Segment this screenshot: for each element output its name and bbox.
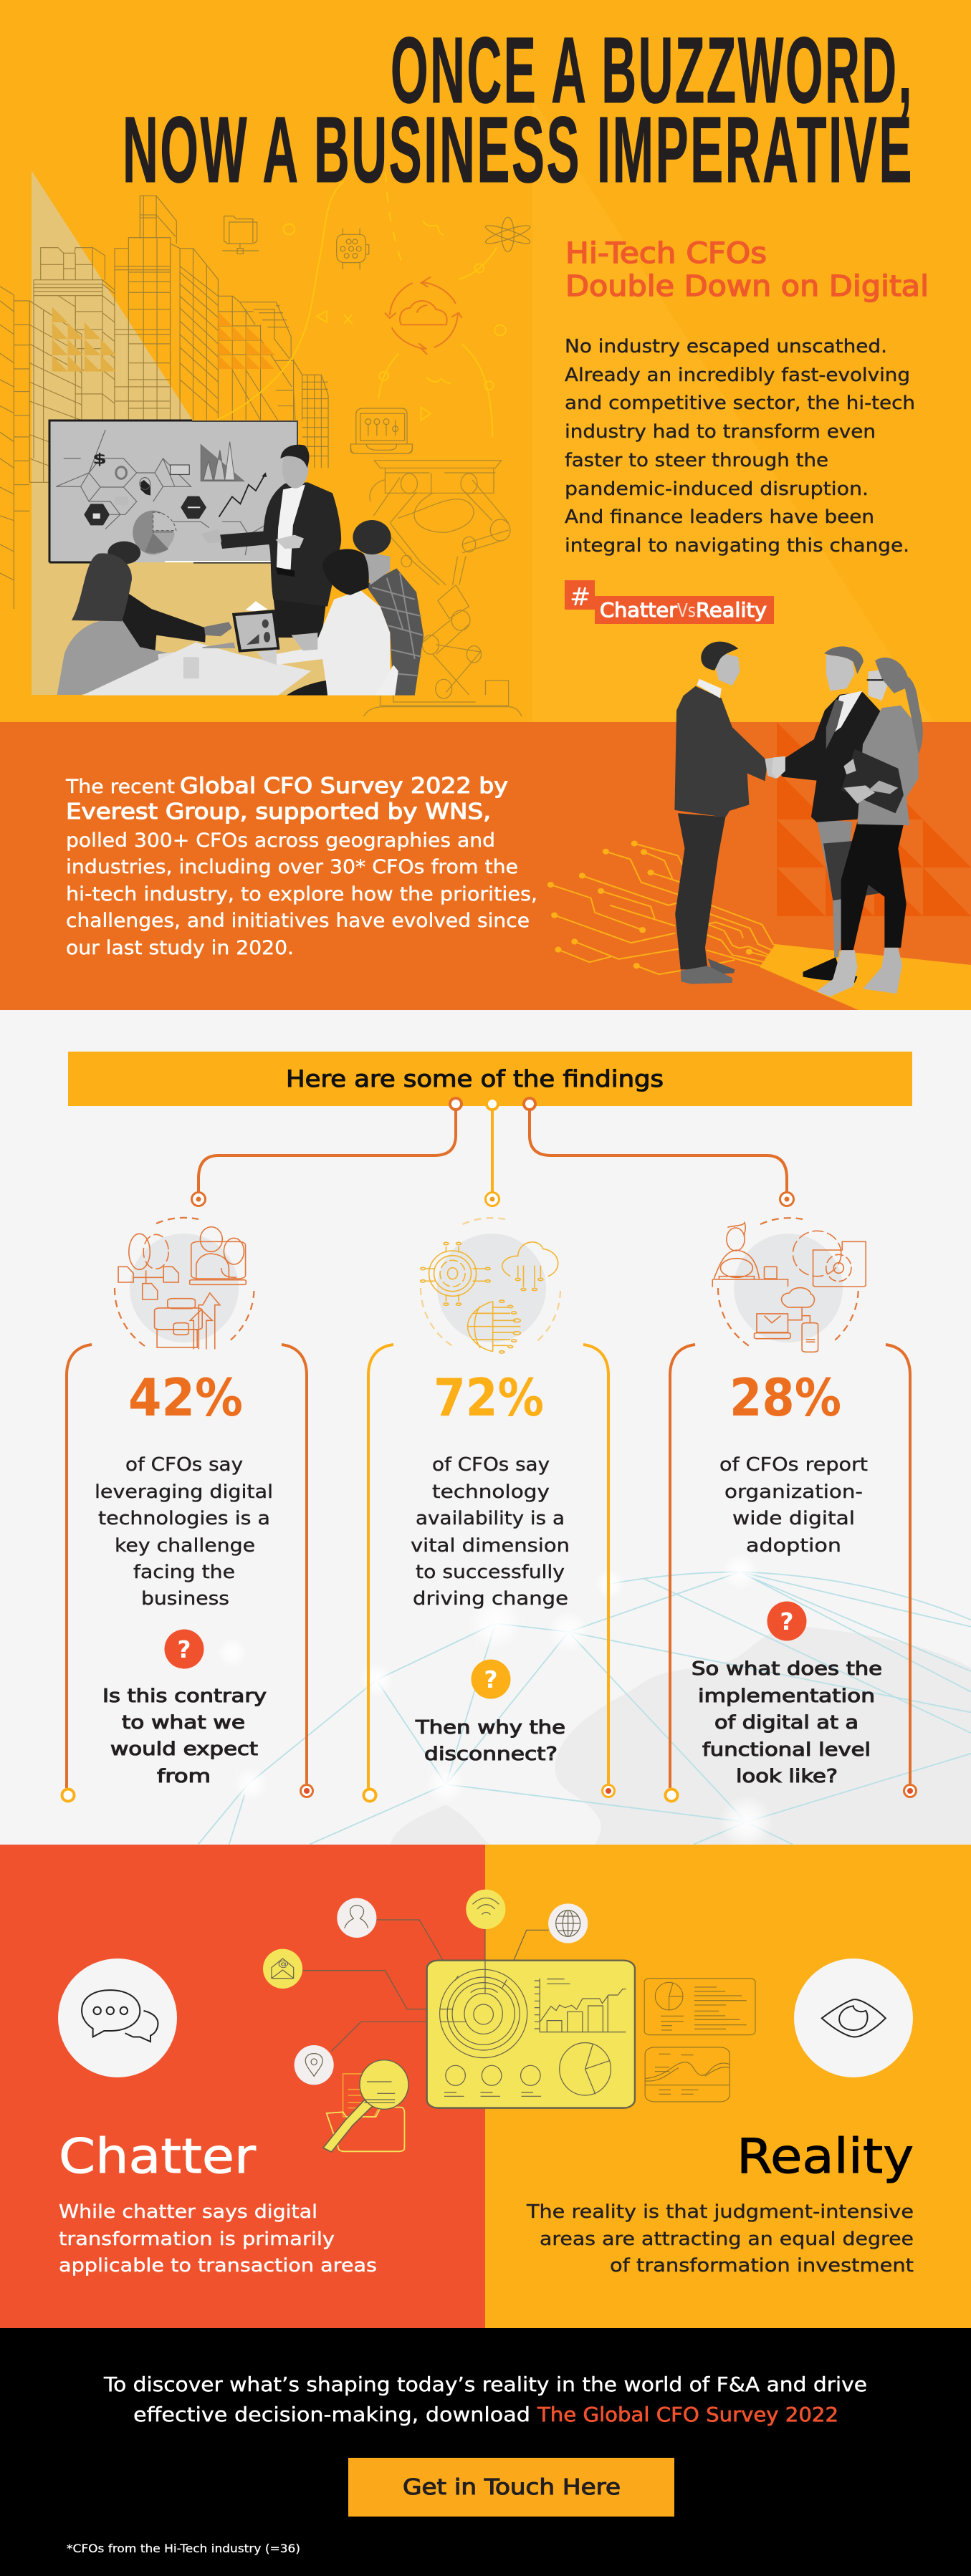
heading: Reality: Reality	[737, 2128, 914, 2184]
heading: Chatter: Chatter	[59, 2128, 256, 2184]
finding 2: 72%: disconnect?	[424, 1744, 558, 1765]
survey description text: hi-tech industry, to explore how the priorities,	[66, 883, 537, 905]
finding 1: 42%: Is this contrary	[102, 1686, 267, 1707]
connector lines	[303, 1920, 549, 2051]
finding 1: 42%: to what we	[122, 1712, 245, 1734]
left businessman	[674, 642, 785, 984]
reality description	[526, 2201, 914, 2277]
intro paragraph: faster to steer through the	[565, 450, 828, 471]
question icon 3	[767, 1602, 807, 1640]
finding 2: 72%: technology	[432, 1481, 550, 1503]
call to action text	[103, 2373, 867, 2426]
finding 3: 28%: So what does the	[692, 1658, 882, 1680]
call to action text: effective decision-making, download	[133, 2403, 530, 2426]
finding 3: 28%: wide digital	[732, 1508, 855, 1529]
side chart cards	[644, 1979, 755, 2102]
reality description: The reality is that judgment-intensive	[526, 2201, 914, 2223]
button: Get in Touch Here: Get in Touch Here	[403, 2475, 621, 2500]
illustration: robot arm	[350, 444, 522, 716]
chatter description: transformation is primarily	[59, 2229, 335, 2250]
findings heading bar	[68, 1052, 912, 1106]
question icon 2: ?	[484, 1666, 498, 1693]
intro paragraph: No industry escaped unscathed.	[565, 336, 887, 357]
question icon 3: ?	[780, 1607, 794, 1635]
icon group: organization-wide adoption	[712, 1218, 866, 1352]
finding 1: 42%: key challenge	[115, 1535, 255, 1557]
finding 2: 72%: of CFOs say	[432, 1454, 550, 1476]
chatter description: applicable to transaction areas	[59, 2255, 377, 2277]
illustration: meeting people photo	[57, 445, 424, 696]
finding 1: 42%: 42%	[128, 1368, 243, 1428]
finding 3: 28%: adoption	[746, 1535, 841, 1557]
illustration: wireframe city buildings	[0, 196, 328, 609]
illustration: meeting whiteboard: $	[92, 450, 107, 467]
illustration: tech icons and connecting curves	[217, 172, 533, 453]
hashtag: ChatterVsReality: #	[570, 583, 590, 612]
circle icons	[263, 1890, 588, 2085]
conference table and laptop	[82, 601, 311, 696]
finding 2: 72%: vital dimension	[411, 1535, 570, 1557]
subheading: Hi-Tech CFOs	[565, 237, 929, 303]
right businessman	[772, 646, 882, 983]
icon group: technology availability	[421, 1218, 560, 1353]
finding 1: 42%: facing the	[133, 1562, 235, 1583]
finding 1: 42%: technologies is a	[98, 1508, 270, 1529]
icon: chat bubbles	[58, 1959, 177, 2077]
chatter description: While chatter says digital	[59, 2201, 317, 2223]
survey description text	[65, 774, 537, 959]
findings heading bar: Here are some of the findings	[286, 1065, 664, 1092]
illustration: meeting whiteboard	[49, 420, 297, 562]
seated man in dark suit	[107, 542, 232, 677]
footnote: *CFOs from the Hi-Tech industry (=36)	[67, 2542, 300, 2555]
panel: findings background	[0, 1010, 971, 1850]
subheading: Hi-Tech CFOs: Double Down on Digital	[565, 270, 929, 303]
survey description text: Global CFO Survey 2022 by	[180, 774, 508, 799]
intro paragraph	[565, 336, 915, 557]
finding 3: 28%: 28%	[730, 1368, 841, 1428]
panel: top yellow hero background	[0, 0, 971, 724]
finding 1: 42%: would expect	[110, 1739, 258, 1760]
woman in white jacket	[257, 549, 398, 696]
bracket frames around findings	[62, 1345, 916, 1801]
intro paragraph: and competitive sector, the hi-tech	[565, 393, 915, 414]
intro paragraph: And finance leaders have been	[565, 506, 874, 528]
survey description text: polled 300+ CFOs across geographies and	[66, 830, 495, 852]
presenter	[201, 445, 341, 638]
hashtag: ChatterVsReality	[565, 580, 774, 624]
survey description text: The recent	[65, 776, 175, 798]
finding 1: 42%: business	[141, 1588, 229, 1610]
intro paragraph: Already an incredibly fast-evolving	[565, 365, 910, 386]
finding 2: 72%: driving change	[413, 1588, 568, 1610]
main title	[123, 17, 914, 202]
intro paragraph: industry had to transform even	[565, 421, 876, 443]
subheading: Hi-Tech CFOs: Hi-Tech CFOs	[565, 237, 767, 270]
businesswoman with folder	[817, 658, 923, 996]
finding 3: 28%: organization-	[724, 1481, 863, 1503]
question icon 1	[165, 1629, 204, 1669]
panel: black call-to-action footer	[0, 2328, 971, 2576]
hashtag: ChatterVsReality: Chatter	[600, 598, 677, 622]
panel: chatter side	[0, 1845, 485, 2329]
finding 3: 28%: look like?	[736, 1766, 838, 1787]
finding 3: 28%	[692, 1368, 882, 1787]
dashboard screen	[427, 1961, 635, 2108]
finding 3: 28%: implementation	[698, 1686, 875, 1707]
reality description: areas are attracting an equal degree	[540, 2229, 914, 2250]
chatter description	[59, 2201, 377, 2277]
finding 3: 28%: functional level	[702, 1739, 871, 1761]
intro paragraph: integral to navigating this change.	[565, 535, 909, 557]
reality description: of transformation investment	[610, 2255, 914, 2277]
finding 3: 28%: of digital at a	[714, 1712, 858, 1734]
finding 1: 42%: from	[157, 1766, 211, 1787]
question icon 1: ?	[177, 1635, 191, 1663]
finding 1: 42%: of CFOs say	[125, 1454, 243, 1476]
illustration: circuit lines	[547, 840, 788, 974]
survey description text: Everest Group, supported by WNS,	[66, 799, 491, 825]
finding 2: 72%: availability is a	[416, 1508, 565, 1529]
finding 3: 28%: of CFOs report	[719, 1454, 868, 1476]
illustration: dashboard with connected icons	[263, 1890, 755, 2152]
magnifier and folder	[323, 2060, 408, 2152]
hashtag: ChatterVsReality: Vs	[677, 600, 696, 622]
icon: eye	[794, 1959, 913, 2077]
panel: orange survey band	[0, 722, 971, 1010]
circle icons: @	[278, 1959, 289, 1969]
finding 1: 42%: leveraging digital	[95, 1481, 273, 1503]
survey description text: our last study in 2020.	[66, 937, 294, 959]
finding 2: 72%	[411, 1368, 570, 1765]
button: Get in Touch Here	[348, 2458, 674, 2517]
survey description text: challenges, and initiatives have evolved since	[66, 910, 530, 932]
intro paragraph: pandemic-induced disruption.	[565, 479, 869, 500]
hashtag: ChatterVsReality: Reality	[696, 598, 767, 622]
seated woman with long hair	[57, 553, 203, 695]
icon group: digital challenge	[115, 1218, 254, 1349]
finding 2: 72%: to successfully	[416, 1562, 565, 1583]
plaid shirt man	[353, 520, 424, 696]
photo: business people shaking hands	[674, 642, 923, 996]
finding 1: 42%	[95, 1368, 273, 1787]
question icon 2	[472, 1659, 510, 1699]
connectors from heading to findings	[192, 1098, 794, 1206]
panel: reality side	[485, 1845, 971, 2329]
finding 2: 72%: 72%	[434, 1368, 544, 1428]
finding 2: 72%: Then why the	[415, 1717, 565, 1739]
call to action text: The Global CFO Survey 2022	[537, 2403, 838, 2426]
survey description text: industries, including over 30* CFOs from the	[66, 856, 518, 878]
call to action text: To discover what’s shaping today’s reality in the world of F&A and drive	[103, 2373, 867, 2396]
